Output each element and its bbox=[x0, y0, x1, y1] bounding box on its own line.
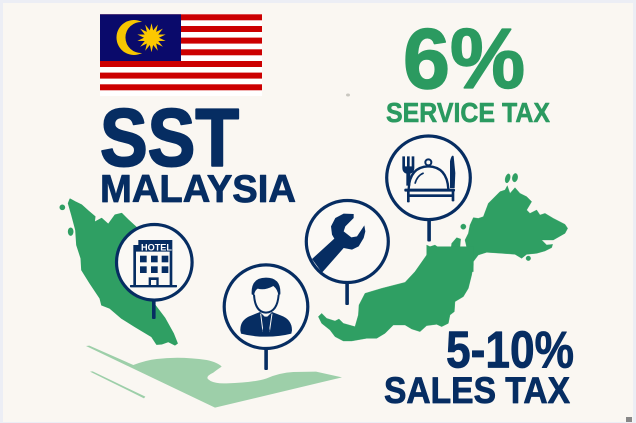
icon pin: wrench bbox=[306, 200, 388, 305]
icon pin: hotel: HOTEL bbox=[141, 242, 172, 254]
icon pin: restaurant bbox=[387, 136, 470, 242]
label: SERVICE TAX: SERVICE TAX bbox=[386, 97, 551, 128]
icon pin: hotel bbox=[116, 224, 192, 319]
icon pin: businessperson bbox=[224, 265, 308, 370]
heading: MALAYSIA: MALAYSIA bbox=[100, 168, 296, 211]
label: SALES TAX: SALES TAX bbox=[384, 370, 570, 411]
icon: Malaysian flag bbox=[100, 14, 262, 96]
speck bbox=[346, 94, 350, 96]
stat: 6%: 6% bbox=[403, 12, 525, 107]
map: peninsular Malaysia bbox=[60, 199, 177, 345]
watermark marker bbox=[626, 417, 632, 422]
heading: SST: SST bbox=[100, 92, 239, 184]
map: light green shadow shape bbox=[86, 346, 342, 408]
stat: 5-10%: 5-10% bbox=[446, 322, 574, 380]
map: East Malaysia bbox=[318, 173, 568, 341]
